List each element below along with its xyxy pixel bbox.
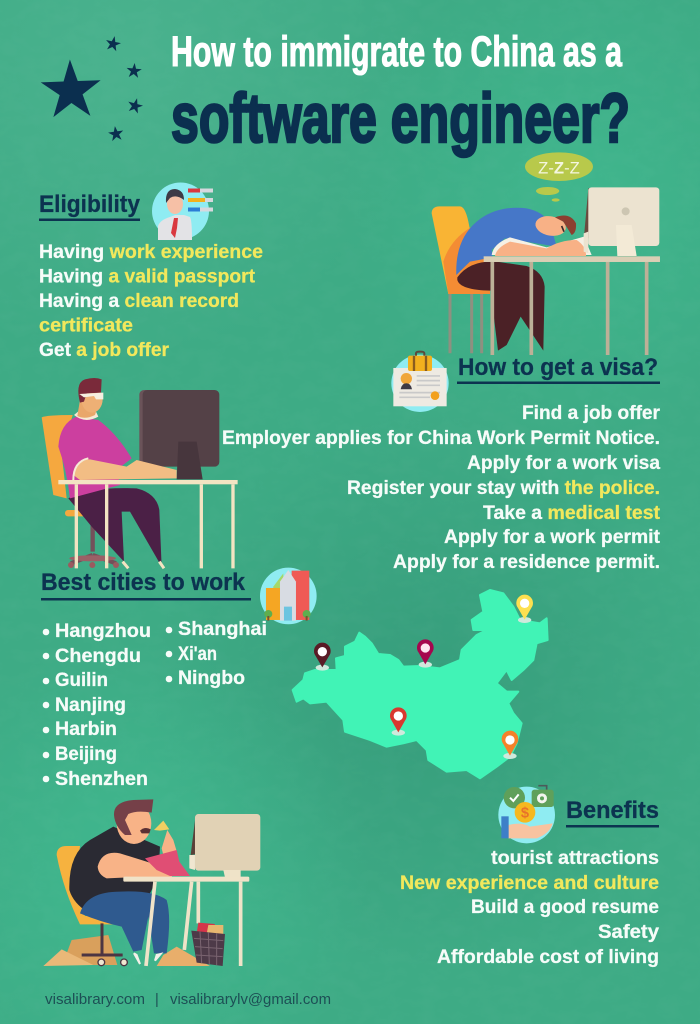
text: eligibility list: certificate: [39, 316, 133, 336]
text: benefits list: [400, 848, 659, 968]
pin: crimson: [417, 639, 434, 668]
text: cities column one: Beijing: [55, 744, 117, 765]
speech bubble: Z-Z-Z: [538, 158, 580, 177]
panel: eligibility: [39, 182, 263, 361]
text: benefits list: tourist attractions: [491, 848, 659, 869]
illustration: engineer typing: [42, 378, 238, 568]
icon: employee: [152, 182, 213, 240]
panel: benefits: [400, 786, 659, 968]
text: visa steps: Register your stay with the police.: [347, 478, 660, 499]
text: benefits list: Build a good resume: [471, 897, 659, 918]
speech bubble: [525, 152, 593, 202]
heading: best cities: Best cities to work: [41, 569, 245, 596]
heading: how to get a visa: How to get a visa?: [458, 354, 658, 381]
map of China with pins: [293, 590, 548, 778]
text: eligibility list: [39, 242, 263, 361]
title: [171, 29, 630, 157]
text: eligibility list: Having work experience: [39, 242, 263, 263]
text: visa steps: Take a medical test: [483, 503, 661, 524]
text: benefits list: Safety: [598, 922, 659, 943]
panel: best cities to work: [41, 568, 317, 790]
pin: yellow: [516, 595, 533, 623]
icon: five stars: [40, 35, 144, 141]
icon: benefits: [498, 786, 555, 843]
text: visa steps: Apply for a residence permit.: [393, 552, 660, 573]
text: cities column one: Chengdu: [55, 646, 141, 667]
icon: visa document: [391, 352, 449, 412]
heading: eligibility: Eligibility: [39, 191, 140, 218]
text: cities column two: Xi'an: [178, 644, 217, 665]
heading: benefits: Benefits: [566, 797, 659, 824]
text: cities column two: Ningbo: [178, 668, 245, 689]
icon: city buildings: [260, 568, 317, 624]
text: benefits list: Affordable cost of living: [437, 947, 659, 968]
pin: dark: [314, 643, 331, 671]
text: benefits list: New experience and culture: [400, 873, 659, 894]
text: eligibility list: Get a job offer: [39, 340, 170, 361]
footer: [45, 992, 331, 1008]
text: cities column one: Shenzhen: [55, 769, 148, 790]
text: cities column one: Harbin: [55, 719, 117, 740]
text: cities column one: Guilin: [55, 670, 108, 691]
illustration: sleeping engineer: [432, 152, 660, 355]
panel: how to get a visa: [222, 352, 661, 573]
text: visa steps: [222, 403, 661, 573]
footer: |: [155, 992, 159, 1008]
text: cities column two: Shanghai: [178, 619, 267, 640]
text: visa steps: Find a job offer: [522, 403, 661, 424]
map outline: [293, 590, 548, 778]
text: cities column one: [43, 621, 151, 790]
text: cities column one: Nanjing: [55, 695, 126, 716]
text: visa steps: Apply for a work permit: [444, 527, 661, 548]
icon: benefits: $: [521, 806, 529, 822]
text: eligibility list: Having a clean record: [39, 291, 239, 312]
text: cities column two: [166, 619, 267, 689]
text: visa steps: Apply for a work visa: [467, 453, 660, 474]
pin: red: [390, 707, 407, 736]
footer: visalibrarylv@gmail.com: [170, 992, 331, 1008]
illustration: engineer eating: [43, 799, 260, 966]
text: cities column one: Hangzhou: [55, 621, 151, 642]
footer: visalibrary.com: [45, 992, 145, 1008]
text: eligibility list: Having a valid passport: [39, 266, 256, 288]
text: visa steps: Employer applies for China Work Permit Notice.: [222, 428, 660, 449]
pin: orange: [502, 731, 518, 759]
